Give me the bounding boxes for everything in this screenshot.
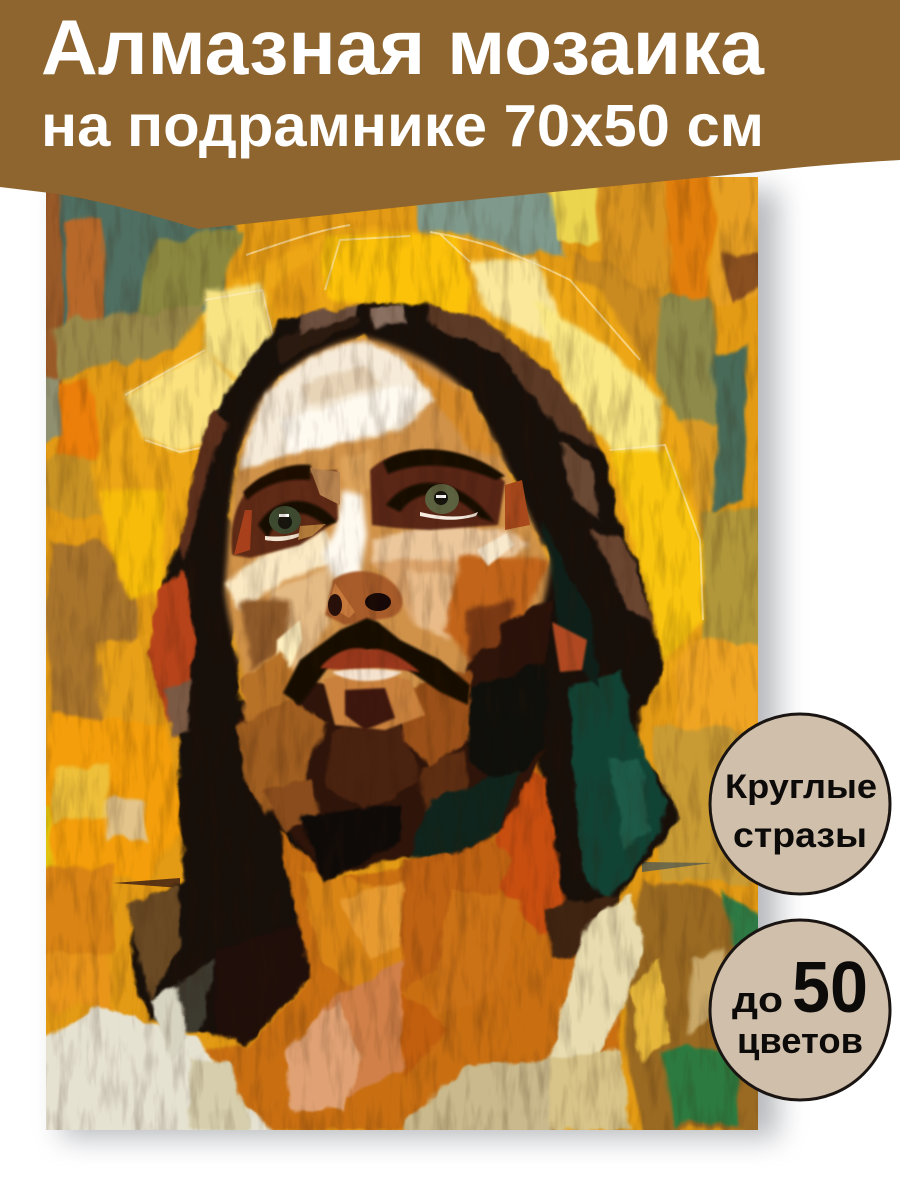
left eye: [231, 464, 340, 558]
lips: [320, 648, 420, 681]
halo: [90, 225, 705, 700]
badge: round rhinestones: [710, 714, 890, 894]
title line 2: на подрамнике 70х50 см: [41, 93, 764, 159]
badge: round rhinestones: стразы: [733, 816, 867, 855]
nose: [325, 571, 402, 625]
neck and chest: [205, 753, 620, 1130]
badge: up to 50 colours: до: [732, 979, 783, 1020]
beard and moustache: [236, 600, 550, 882]
face: [220, 333, 554, 704]
canvas shadow: [62, 190, 778, 1138]
hair: [126, 304, 679, 1046]
badge: up to 50 colours: [710, 920, 890, 1100]
banner: [0, 0, 900, 229]
title line 1: Алмазная мозаика: [41, 3, 765, 91]
badge: up to 50 colours: цветов: [737, 1020, 863, 1061]
moustache: [283, 618, 470, 705]
nose highlight: [322, 490, 367, 580]
robe: [40, 895, 670, 1135]
badge: up to 50 colours: 50: [792, 948, 868, 1028]
badge: round rhinestones: Круглые: [725, 768, 877, 806]
spikes: [113, 862, 712, 888]
right eye: [370, 449, 530, 530]
painting: portrait on canvas: [30, 170, 775, 1135]
painting background: [30, 170, 775, 1130]
